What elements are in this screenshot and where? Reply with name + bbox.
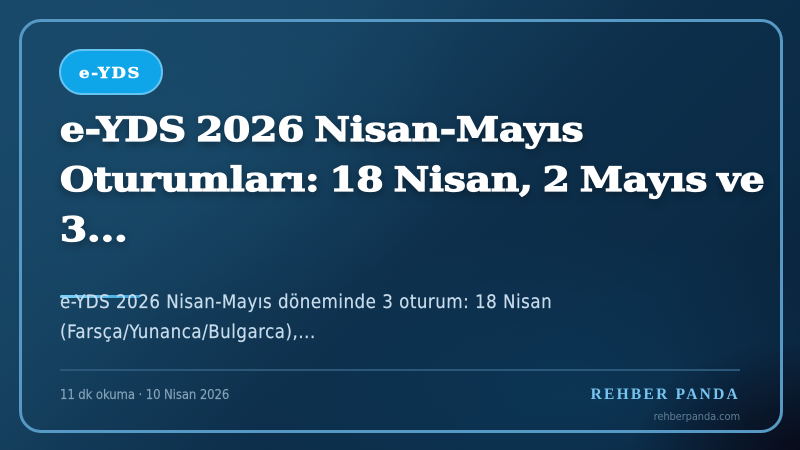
title line 2: Oturumları: 18 Nisan, 2 Mayıs ve [60, 160, 765, 199]
brand website: rehberpanda.com [654, 410, 740, 423]
title [58, 110, 765, 249]
description line 1: e-YDS 2026 Nisan-Mayıs döneminde 3 oturum: 18 Nisan [60, 292, 552, 313]
divider [60, 369, 740, 371]
meta: reading time and date: 11 dk okuma · 10 Nisan 2026 [60, 388, 229, 403]
brand name: REHBER PANDA [591, 386, 740, 403]
title line 1: e-YDS 2026 Nisan-Mayıs [60, 110, 583, 149]
badge: e-YDS: e-YDS [79, 65, 141, 82]
badge: e-YDS [59, 49, 163, 95]
title line 3: 3... [60, 210, 128, 249]
description text [60, 292, 552, 343]
description line 2: (Farsça/Yunanca/Bulgarca),... [60, 322, 316, 343]
accent bar [60, 295, 140, 298]
